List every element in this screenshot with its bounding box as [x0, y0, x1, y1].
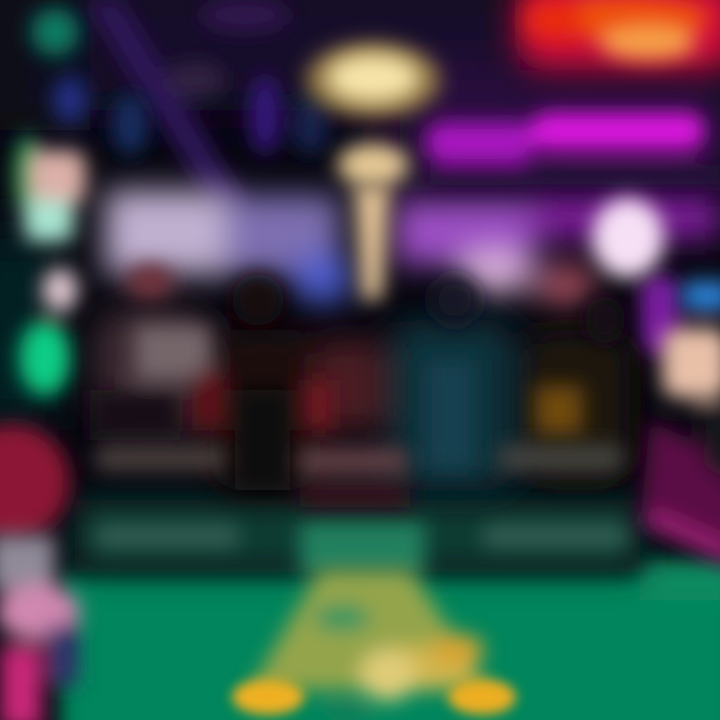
neon sign: top right [515, 0, 720, 70]
bottom-left decor [0, 535, 80, 720]
green floor [60, 560, 720, 720]
ceiling [0, 0, 720, 430]
bottom-left mushroom [0, 424, 70, 540]
lower lamp [337, 143, 409, 187]
left lights [14, 8, 148, 396]
tables [95, 445, 627, 547]
white glow [592, 198, 664, 278]
green centre of table band [300, 522, 425, 577]
mid band of lights [105, 190, 720, 305]
silhouettes of people [95, 310, 630, 490]
gold floor pattern [250, 570, 490, 720]
neon sign: bright core [525, 0, 710, 60]
magenta bands [425, 112, 720, 355]
chandelier column [354, 185, 390, 300]
ceiling stripes [85, 0, 328, 210]
central chandelier [305, 42, 441, 300]
table band shadow [75, 500, 640, 572]
right side decor [640, 280, 720, 570]
gold floor ellipses [232, 679, 516, 715]
heads and clothing [90, 264, 625, 490]
upper lamp [305, 42, 441, 118]
